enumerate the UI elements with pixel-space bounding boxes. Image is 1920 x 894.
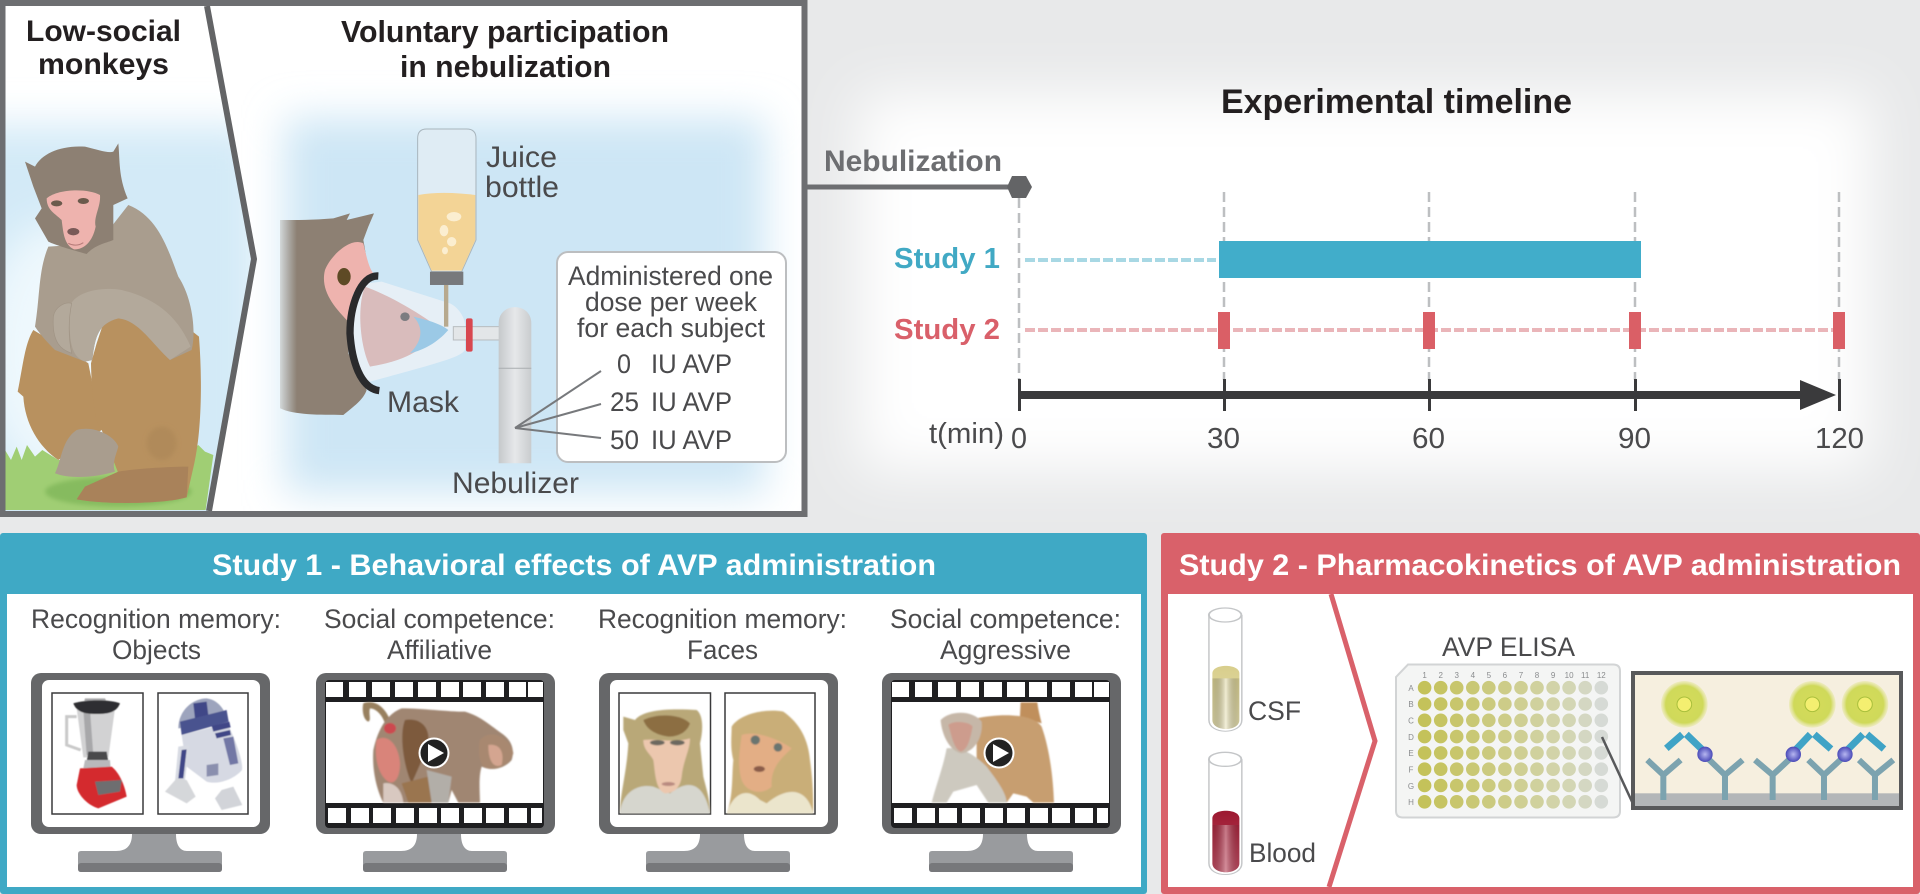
image: monkey face one <box>620 709 710 813</box>
callout: dosage box <box>557 252 786 462</box>
plate row letters: H <box>1408 798 1414 807</box>
axis labels: 0 <box>1011 423 1027 455</box>
timeline title: Experimental timeline <box>1221 83 1572 121</box>
panel divider chevron <box>207 6 254 511</box>
axis labels: 120 <box>1815 423 1864 455</box>
axis labels: t(min) <box>929 418 1004 450</box>
time gridlines <box>1019 192 1839 380</box>
plate column numbers: 9 <box>1551 671 1556 680</box>
study 2 sample markers <box>1218 312 1845 349</box>
study 2 heading: Study 2 - Pharmacokinetics of AVP administration <box>1179 549 1901 582</box>
panel: study 2 <box>1161 533 1920 894</box>
nebulization marker <box>1007 176 1032 198</box>
image: grooming monkeys <box>363 702 513 803</box>
detection antibodies <box>1666 713 1884 752</box>
study 1 bar <box>1219 241 1641 278</box>
chart: experimental timeline <box>806 83 1864 455</box>
plate column numbers: 8 <box>1535 671 1540 680</box>
plate row letters: G <box>1408 782 1414 791</box>
head <box>25 143 128 254</box>
face <box>47 190 100 249</box>
callout text: doses: IU AVP <box>651 387 732 417</box>
axis labels: 60 <box>1412 423 1445 455</box>
task: recognition memory objects <box>31 604 281 872</box>
time axis arrow <box>1018 379 1841 411</box>
illustration: nebulizer <box>453 307 531 463</box>
task: recognition memory faces: Faces <box>687 635 758 665</box>
sky: right nebulizer panel <box>285 118 765 493</box>
label: nebulizer: Nebulizer <box>452 467 579 500</box>
callout text: dosing schedule: dose per week <box>585 287 758 317</box>
study 2 label: Study 2 <box>894 314 1000 346</box>
plate wells <box>1418 681 1608 809</box>
plate column numbers <box>1422 671 1606 680</box>
mask <box>350 282 465 382</box>
callout text: doses: IU AVP <box>651 425 732 455</box>
image: aggressive monkey <box>932 702 1054 803</box>
heading: low-social monkeys: monkeys <box>38 48 169 81</box>
task: social competence aggressive: Social competence: <box>890 604 1121 634</box>
study 1 lead-in <box>1025 258 1216 262</box>
label: CSF: CSF <box>1248 696 1301 726</box>
background: timeline white glow <box>860 95 1870 470</box>
plate column numbers: 3 <box>1454 671 1459 680</box>
arm <box>70 289 191 362</box>
task: social competence affiliative: Affiliative <box>387 635 492 665</box>
heading: voluntary participation <box>341 15 669 84</box>
illustration: monkey wearing mask <box>280 213 465 415</box>
image: monkey face two <box>727 711 813 813</box>
plate column numbers: 2 <box>1438 671 1443 680</box>
callout text: dosing schedule: for each subject <box>577 313 766 343</box>
panel: nebulization setup <box>0 3 805 555</box>
callout text: dosing schedule <box>568 261 773 343</box>
panel: study 1 <box>0 533 1147 894</box>
icon: play button <box>984 738 1014 768</box>
task: recognition memory faces: Recognition memory: <box>598 604 847 634</box>
plate column numbers: 7 <box>1519 671 1524 680</box>
nebulization connector <box>806 184 1012 190</box>
plate column numbers: 1 <box>1422 671 1427 680</box>
plate column numbers: 5 <box>1487 671 1492 680</box>
illustration: juice bottle <box>418 129 476 327</box>
legs <box>18 330 102 460</box>
zoom leader line <box>1602 737 1634 806</box>
plate row letters: C <box>1408 716 1414 726</box>
glow halos <box>1661 681 1888 728</box>
task: social competence affiliative: Social competence: <box>324 604 555 634</box>
callout text: doses: IU AVP <box>651 349 732 379</box>
study 1 label: Study 1 <box>894 243 1000 275</box>
plate column numbers: 12 <box>1597 671 1606 680</box>
torso <box>35 205 194 362</box>
task: social competence aggressive: Aggressive <box>940 635 1071 665</box>
heading: voluntary participation: Voluntary participation <box>341 15 669 49</box>
callout text: dosing schedule: Administered one <box>568 261 773 291</box>
callout text: doses: 0 <box>617 349 631 379</box>
plate row letters: B <box>1408 700 1414 709</box>
light cores <box>1677 697 1872 712</box>
heading: low-social monkeys: Low-social <box>26 15 181 48</box>
axis labels: 30 <box>1207 423 1240 455</box>
image: blender <box>67 698 127 808</box>
illustration: low-social monkey <box>5 143 213 510</box>
label: blood: Blood <box>1249 838 1316 868</box>
grass <box>5 445 213 510</box>
capture antibodies <box>1647 756 1893 800</box>
label: mask: Mask <box>387 386 460 419</box>
dose leader lines <box>515 371 601 438</box>
plate floor <box>1633 793 1901 806</box>
icon: blood tube <box>1209 752 1242 875</box>
panel divider chevron <box>1329 594 1375 887</box>
monitor: aggressive video <box>882 673 1121 872</box>
inset: ELISA antibodies <box>1633 673 1901 808</box>
image: robot <box>165 698 242 810</box>
panel border <box>2 3 804 514</box>
task: social competence affiliative <box>316 604 555 872</box>
label: juice bottle: bottle <box>485 171 559 204</box>
task: recognition memory objects: Recognition memory: <box>31 604 281 634</box>
heading: low-social monkeys <box>26 15 181 81</box>
plate row letters <box>1408 684 1414 807</box>
plate row letters: A <box>1408 684 1414 693</box>
icon: play button <box>418 738 450 768</box>
callout text: doses <box>610 349 732 455</box>
task: recognition memory faces <box>598 604 847 872</box>
monitor: objects <box>31 673 270 872</box>
plate column numbers: 10 <box>1565 671 1574 680</box>
study 2 dashed <box>1025 328 1833 332</box>
axis labels <box>929 418 1864 455</box>
axis labels: 90 <box>1618 423 1651 455</box>
plate row letters: D <box>1408 733 1414 742</box>
plate column numbers: 11 <box>1581 671 1590 680</box>
label: AVP ELISA: AVP ELISA <box>1442 632 1575 662</box>
monitor: affiliative video <box>316 673 555 872</box>
plate column numbers: 6 <box>1503 671 1508 680</box>
sky: left monkey panel <box>6 108 251 511</box>
monitor: faces <box>599 673 838 872</box>
task: social competence aggressive <box>882 604 1121 872</box>
plate column numbers: 4 <box>1471 671 1476 680</box>
hand <box>55 429 118 477</box>
plate row letters: E <box>1408 749 1414 758</box>
label: juice bottle <box>485 141 559 204</box>
callout text: doses: 50 <box>610 425 639 455</box>
plate row letters: F <box>1409 766 1414 774</box>
callout text: doses: 25 <box>610 387 639 417</box>
label: juice bottle: Juice <box>486 141 557 174</box>
nebulization label: Nebulization <box>824 145 1002 178</box>
study 1 heading: Study 1 - Behavioral effects of AVP administration <box>212 549 936 582</box>
antigen dots <box>1697 747 1853 762</box>
icon: CSF tube <box>1209 608 1242 731</box>
task: recognition memory objects: Objects <box>112 635 201 665</box>
heading: voluntary participation: in nebulization <box>400 50 611 84</box>
illustration: 96-well plate <box>1396 664 1620 818</box>
